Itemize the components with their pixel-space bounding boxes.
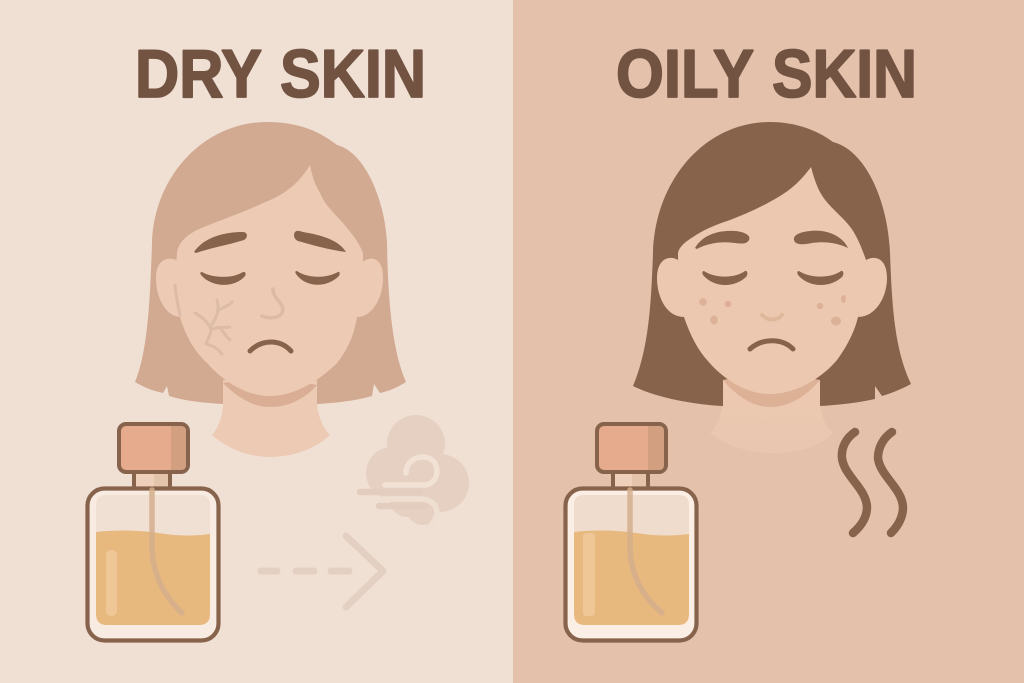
dip tube <box>152 490 182 613</box>
hair <box>135 122 406 404</box>
panel: dry skin <box>0 0 513 683</box>
bottle cap <box>597 424 666 472</box>
closed eyes <box>200 271 340 285</box>
upper glass <box>96 495 210 540</box>
illustration: oily skin face <box>633 122 911 453</box>
closed eyes <box>702 271 843 285</box>
heading: dry skin: DRY <box>135 36 262 112</box>
icon: cloud with wind <box>360 415 469 527</box>
bottle neck <box>613 470 648 490</box>
heading: oily skin <box>616 36 917 112</box>
face <box>678 167 866 394</box>
neck <box>710 380 833 453</box>
skin cracks <box>175 285 232 354</box>
heading: dry skin: SKIN <box>280 36 426 112</box>
wind lines <box>360 492 425 506</box>
upper glass <box>574 495 689 540</box>
highlight <box>583 533 595 616</box>
cloud <box>366 415 469 525</box>
mouth <box>750 341 793 349</box>
arrow: dashed <box>261 536 383 607</box>
bottle neck <box>134 470 170 490</box>
face <box>176 165 363 396</box>
ears <box>156 259 383 317</box>
neck <box>212 380 330 457</box>
icon: dry skin oil bottle <box>88 424 218 640</box>
nose <box>262 289 283 318</box>
icon: oily skin oil bottle <box>566 424 696 640</box>
illustration: dry skin face <box>135 122 406 457</box>
bottle cap <box>119 424 188 472</box>
heading: oily skin: SKIN <box>772 36 917 112</box>
oil <box>96 531 210 625</box>
neck shadow <box>223 375 317 407</box>
nose <box>762 315 782 320</box>
mouth <box>250 342 291 351</box>
oil <box>574 531 689 625</box>
bottle body <box>566 488 696 640</box>
heading: dry skin <box>135 36 426 112</box>
eyebrows <box>194 231 346 253</box>
neck shadow <box>723 370 820 407</box>
hair <box>633 122 911 406</box>
freckles <box>699 295 846 326</box>
highlight <box>106 550 117 616</box>
ears <box>657 258 887 317</box>
dip tube <box>630 490 662 613</box>
icon: wavy oil lines <box>842 432 903 533</box>
panel: oily skin <box>513 0 1024 683</box>
heading: oily skin: OILY <box>616 36 754 112</box>
eyebrows <box>695 231 848 249</box>
bottle body <box>88 488 218 640</box>
